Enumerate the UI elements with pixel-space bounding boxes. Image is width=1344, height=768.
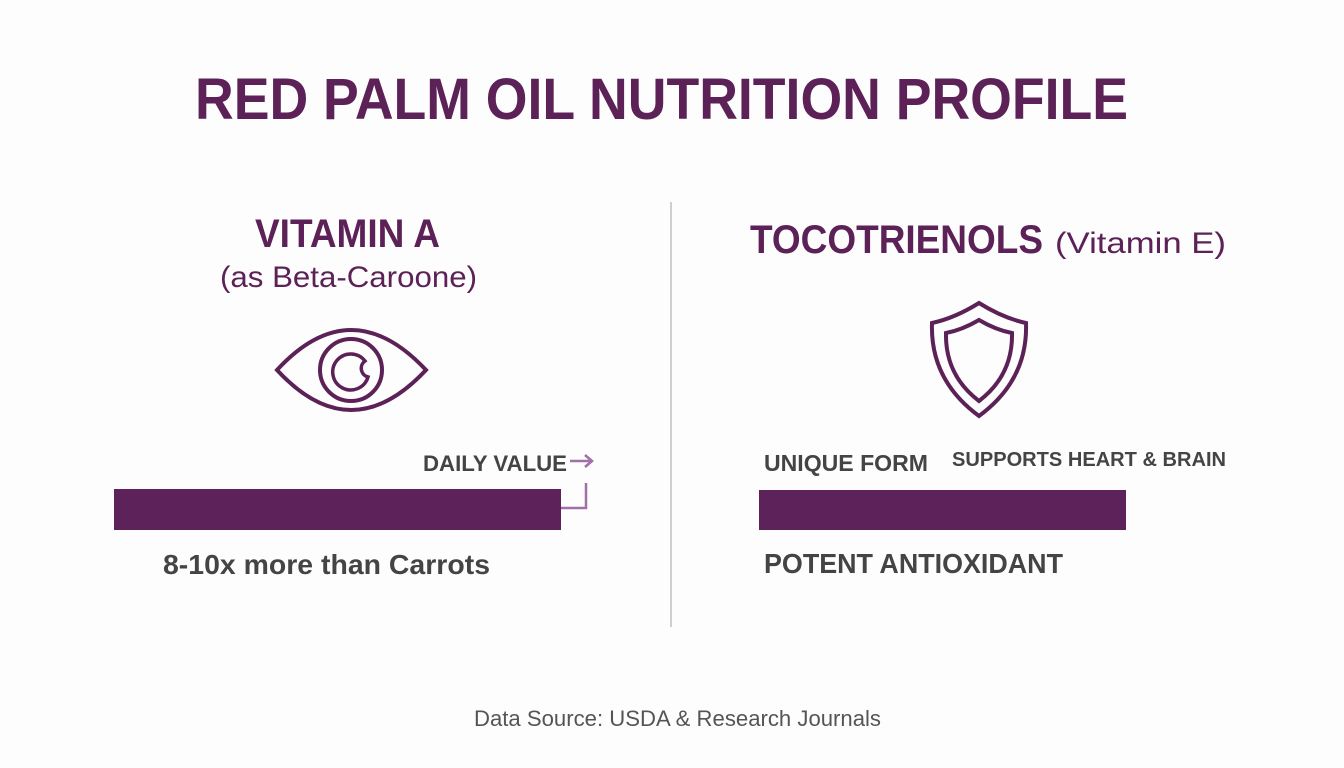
caption: 8-10x more than Carrots bbox=[163, 549, 490, 580]
title: RED PALM OIL NUTRITION PROFILE bbox=[195, 67, 1128, 132]
bar bbox=[759, 490, 1126, 530]
subheading: (as Beta-Caroone) bbox=[220, 261, 477, 294]
label: unique form: UNIQUE FORM bbox=[764, 450, 928, 476]
caption: POTENT ANTIOXIDANT bbox=[764, 548, 1063, 579]
bar bbox=[114, 489, 561, 530]
label: supports heart & brain: SUPPORTS HEART & BRAIN bbox=[952, 449, 1226, 471]
icon: eye bbox=[277, 330, 426, 410]
panel: tocotrienols: (Vitamin E) bbox=[1055, 227, 1226, 260]
icon: shield bbox=[932, 303, 1026, 416]
arrow bbox=[561, 455, 592, 508]
panel: tocotrienols bbox=[750, 218, 1226, 579]
heading: tocotrienols: TOCOTRIENOLS bbox=[750, 218, 1043, 262]
footer: data source: Data Source: USDA & Research Journals bbox=[474, 706, 881, 731]
label: daily value: DAILY VALUE bbox=[423, 451, 567, 476]
heading: vitamin A: VITAMIN A bbox=[255, 212, 440, 256]
panel: vitamin A bbox=[114, 212, 592, 580]
